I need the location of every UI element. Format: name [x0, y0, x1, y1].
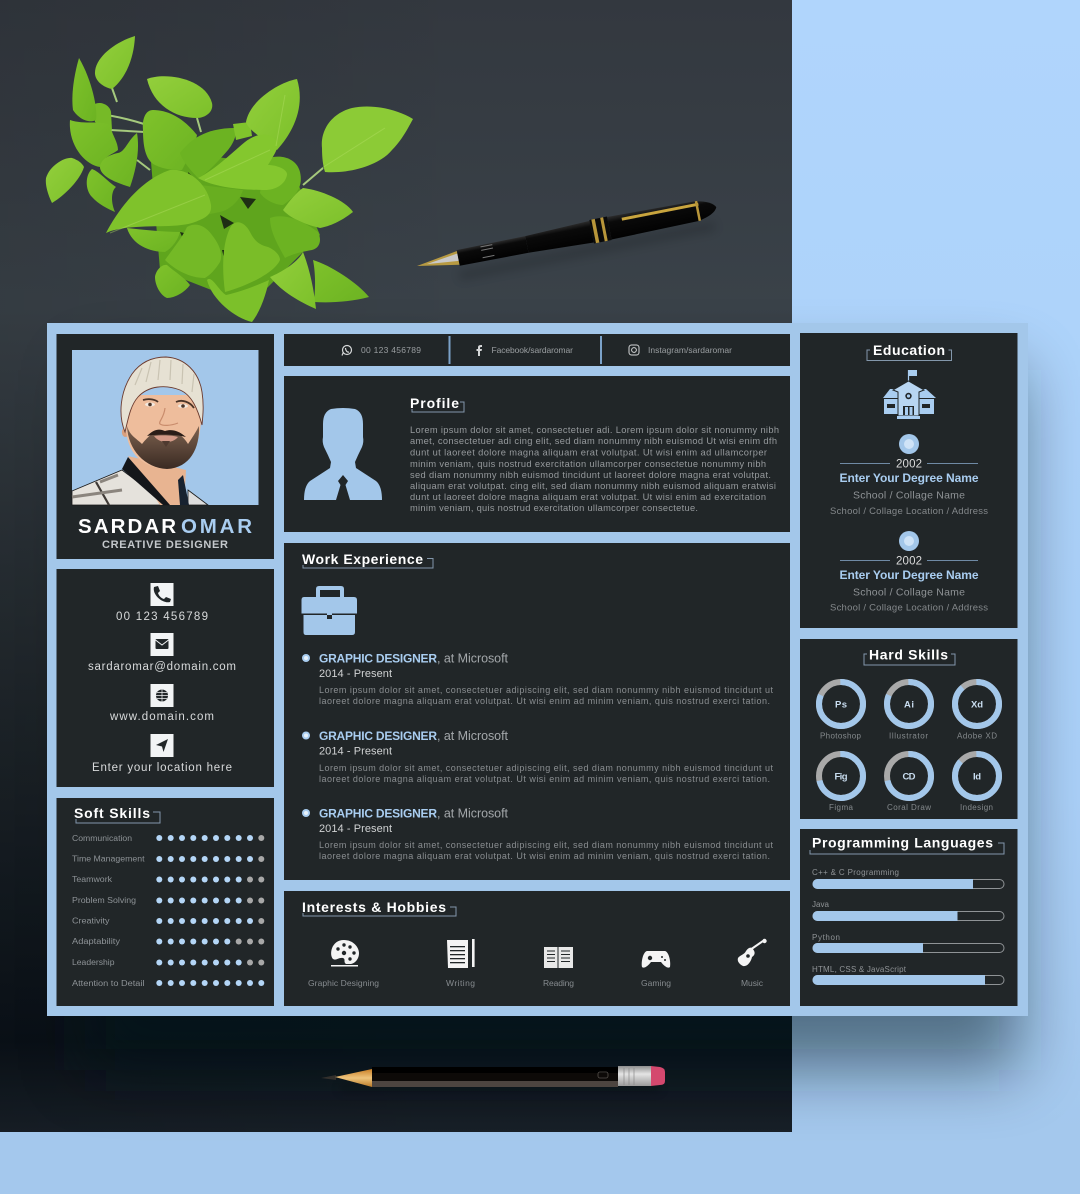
icon: location arrow — [150, 734, 174, 757]
ring: photoshop: Photoshop — [820, 732, 862, 740]
education entry 2 — [830, 531, 988, 614]
ring: illustrator: Illustrator — [889, 732, 928, 740]
ring: adobe xd: Xd — [971, 700, 983, 710]
job entry 2: Lorem ipsum dolor sit amet, consectetuer adipiscing elit, sed diam nonummy nibh euismod tincidunt ut — [319, 763, 773, 773]
education entry 1: Enter Your Degree Name — [840, 471, 979, 485]
skill labels: Attention to Detail — [72, 979, 145, 988]
job entry 1: GRAPHIC DESIGNER — [319, 652, 437, 666]
ring: adobe xd: Adobe XD — [957, 732, 997, 740]
profile text: Lorem ipsum dolor sit amet, consectetuer adi. Lorem ipsum dolor sit nonummy nibh — [410, 425, 779, 435]
panel: interests and hobbies — [284, 891, 790, 1006]
ring: figma — [819, 754, 863, 812]
bar: python — [812, 933, 1004, 953]
hobby: reading — [543, 947, 574, 988]
skill labels: Adaptability — [72, 937, 120, 946]
bar: java: Java — [812, 900, 830, 909]
icon: globe — [150, 684, 174, 707]
icon: envelope — [150, 633, 174, 656]
skill labels: Creativity — [72, 916, 110, 926]
job entry 3: Lorem ipsum dolor sit amet, consectetuer adipiscing elit, sed diam nonummy nibh euismod tincidunt ut — [319, 840, 773, 850]
profile text: amet, consectetuer adi cing elit, sed diam nonummy nibh euismod Ut wisi enim dfh — [410, 436, 777, 446]
location: Enter your location here — [92, 762, 232, 774]
heading: work experience: Work Experience — [302, 551, 423, 567]
bar: html css javascript — [812, 965, 1004, 985]
job title: CREATIVE DESIGNER — [102, 539, 228, 551]
heading: programming languages: Programming Languages — [812, 834, 993, 850]
phone number: 00 123 456789 — [116, 611, 208, 623]
ring: indesign: Indesign — [960, 803, 993, 812]
skill rating dots — [156, 835, 264, 986]
skill labels: Time Management — [72, 854, 145, 864]
hobby: music: Music — [741, 978, 764, 988]
ring: photoshop: Ps — [835, 700, 847, 710]
bar: python: Python — [812, 933, 840, 942]
resume sheet — [47, 323, 1028, 1016]
job entry 2: laoreet dolore magna aliquam erat volutpat. Ut wisi enim ad minim veniam, quis nostrud exerci tation. — [319, 774, 770, 784]
job entry 3: 2014 - Present — [319, 823, 392, 835]
panel: education — [800, 333, 1018, 628]
skill labels: Leadership — [72, 958, 115, 967]
education entry 2: 2002 — [896, 556, 922, 568]
ring: photoshop — [819, 682, 863, 740]
name: SARDAR — [78, 515, 176, 538]
hobby: graphic designing — [308, 940, 379, 988]
icon: person silhouette — [304, 408, 382, 500]
profile text: minim veniam, quis nostrud exercitation ullamcorper consectetue nonummy nibh — [410, 459, 766, 469]
bar: java — [812, 900, 1004, 921]
profile text: dunt ut laoreet dolore magna aliquam erat volutpat. Ut wisi enim ad exercitation — [410, 492, 766, 502]
fountain pen — [415, 196, 721, 288]
panel: contact — [56, 569, 274, 787]
job entry 3 — [302, 806, 773, 861]
bar: html css javascript: HTML, CSS & JavaScript — [812, 965, 907, 974]
heading: soft skills: Soft Skills — [74, 805, 150, 821]
job entry 1: laoreet dolore magna aliquam erat volutpat. Ut wisi enim ad minim veniam, quis nostrud exerci tation. — [319, 696, 770, 706]
portrait illustration — [72, 350, 258, 505]
ring: illustrator: Ai — [904, 700, 914, 710]
education entry 1: School / Collage Location / Address — [830, 506, 988, 517]
education entry 2: School / Collage Location / Address — [830, 602, 988, 614]
panel: programming languages — [800, 829, 1018, 1006]
name — [78, 515, 252, 538]
hobby: graphic designing: Graphic Designing — [308, 978, 379, 988]
job entry 2: , at Microsoft — [437, 729, 509, 743]
website: www.domain.com — [109, 711, 214, 723]
hobby: gaming — [641, 951, 671, 988]
profile text: minim veniam, quis nostrud exercitation ullamcorper consectetue. — [410, 503, 698, 513]
profile text: aliquam erat volutpat. cing elit, sed diam nonummy nibh euismod aliquam eratwisi — [410, 481, 776, 491]
hobby: gaming: Gaming — [641, 978, 671, 988]
skill labels: Teamwork — [72, 875, 113, 884]
job entry 3: GRAPHIC DESIGNER — [319, 806, 437, 820]
profile text — [410, 425, 779, 513]
job entry 1: 2014 - Present — [319, 668, 392, 680]
education entry 2: School / Collage Name — [853, 586, 965, 598]
skill labels: Communication — [72, 834, 132, 843]
job entry 1 — [302, 652, 773, 706]
ring: indesign: Id — [973, 772, 981, 782]
icon: briefcase — [302, 586, 357, 635]
ring: coral draw: Coral Draw — [887, 803, 931, 812]
panel: photo and name — [56, 334, 274, 559]
profile text: sed diam nonummy nibh euismod tincidunt ut laoreet dolore magna erat volutpat. — [410, 470, 771, 480]
heading: education: Education — [873, 342, 945, 358]
ring: adobe xd — [955, 682, 999, 740]
name: OMAR — [181, 515, 252, 538]
whatsapp number: 00 123 456789 — [361, 345, 421, 355]
ring: indesign — [955, 754, 999, 812]
ring: coral draw: CD — [902, 772, 916, 782]
skill labels — [72, 834, 145, 988]
panel: hard skills — [800, 639, 1018, 819]
education entry 1: 2002 — [896, 458, 922, 470]
hobby: reading: Reading — [543, 978, 574, 988]
bar: c++ — [812, 868, 1004, 889]
job entry 1: , at Microsoft — [437, 652, 509, 666]
plant — [46, 36, 413, 322]
ring: coral draw — [887, 754, 931, 812]
heading: profile: Profile — [410, 395, 459, 411]
education entry 2: Enter Your Degree Name — [840, 568, 979, 582]
instagram handle: Instagram/sardaromar — [648, 345, 732, 355]
ring: figma: Fig — [834, 772, 848, 782]
hobby: writing: Writing — [446, 978, 475, 988]
panel: profile — [284, 376, 790, 532]
job entry 3: laoreet dolore magna aliquam erat volutpat. Ut wisi enim ad minim veniam, quis nostrud exerci tation. — [319, 851, 770, 861]
job entry 2: 2014 - Present — [319, 746, 392, 758]
panel: social bar — [284, 334, 790, 366]
profile text: dunt ut laoreet dolore magna aliquam erat volutpat. Ut wisi enim ad ullamcorper — [410, 448, 767, 458]
panel: soft skills — [56, 798, 274, 1006]
hobby: music — [738, 939, 767, 988]
ring: figma: Figma — [829, 803, 854, 812]
pencil — [321, 1066, 665, 1091]
heading: hard skills: Hard Skills — [869, 646, 948, 662]
sheet shadow — [85, 370, 1020, 1070]
background: dark desk — [0, 0, 792, 1132]
icon: instagram — [629, 345, 639, 355]
bar: c++: C++ & C Programming — [812, 868, 899, 877]
email: sardaromar@domain.com — [88, 661, 236, 673]
heading: interests and hobbies: Interests & Hobbies — [302, 899, 446, 915]
education entry 1 — [830, 434, 988, 517]
icon: school — [883, 370, 936, 419]
skill labels: Problem Solving — [72, 896, 136, 905]
job entry 3: , at Microsoft — [437, 806, 509, 820]
ring: illustrator — [887, 682, 931, 740]
job entry 1: Lorem ipsum dolor sit amet, consectetuer adipiscing elit, sed diam nonummy nibh euismod tincidunt ut — [319, 685, 773, 695]
icon: whatsapp — [342, 346, 352, 356]
facebook handle: Facebook/sardaromar — [492, 345, 573, 355]
icon: facebook — [476, 345, 482, 356]
job entry 2 — [302, 729, 773, 784]
education entry 1: School / Collage Name — [853, 490, 965, 502]
hobby: writing — [446, 939, 475, 988]
icon: phone — [150, 583, 174, 606]
panel: work experience — [284, 543, 790, 880]
job entry 2: GRAPHIC DESIGNER — [319, 729, 437, 743]
